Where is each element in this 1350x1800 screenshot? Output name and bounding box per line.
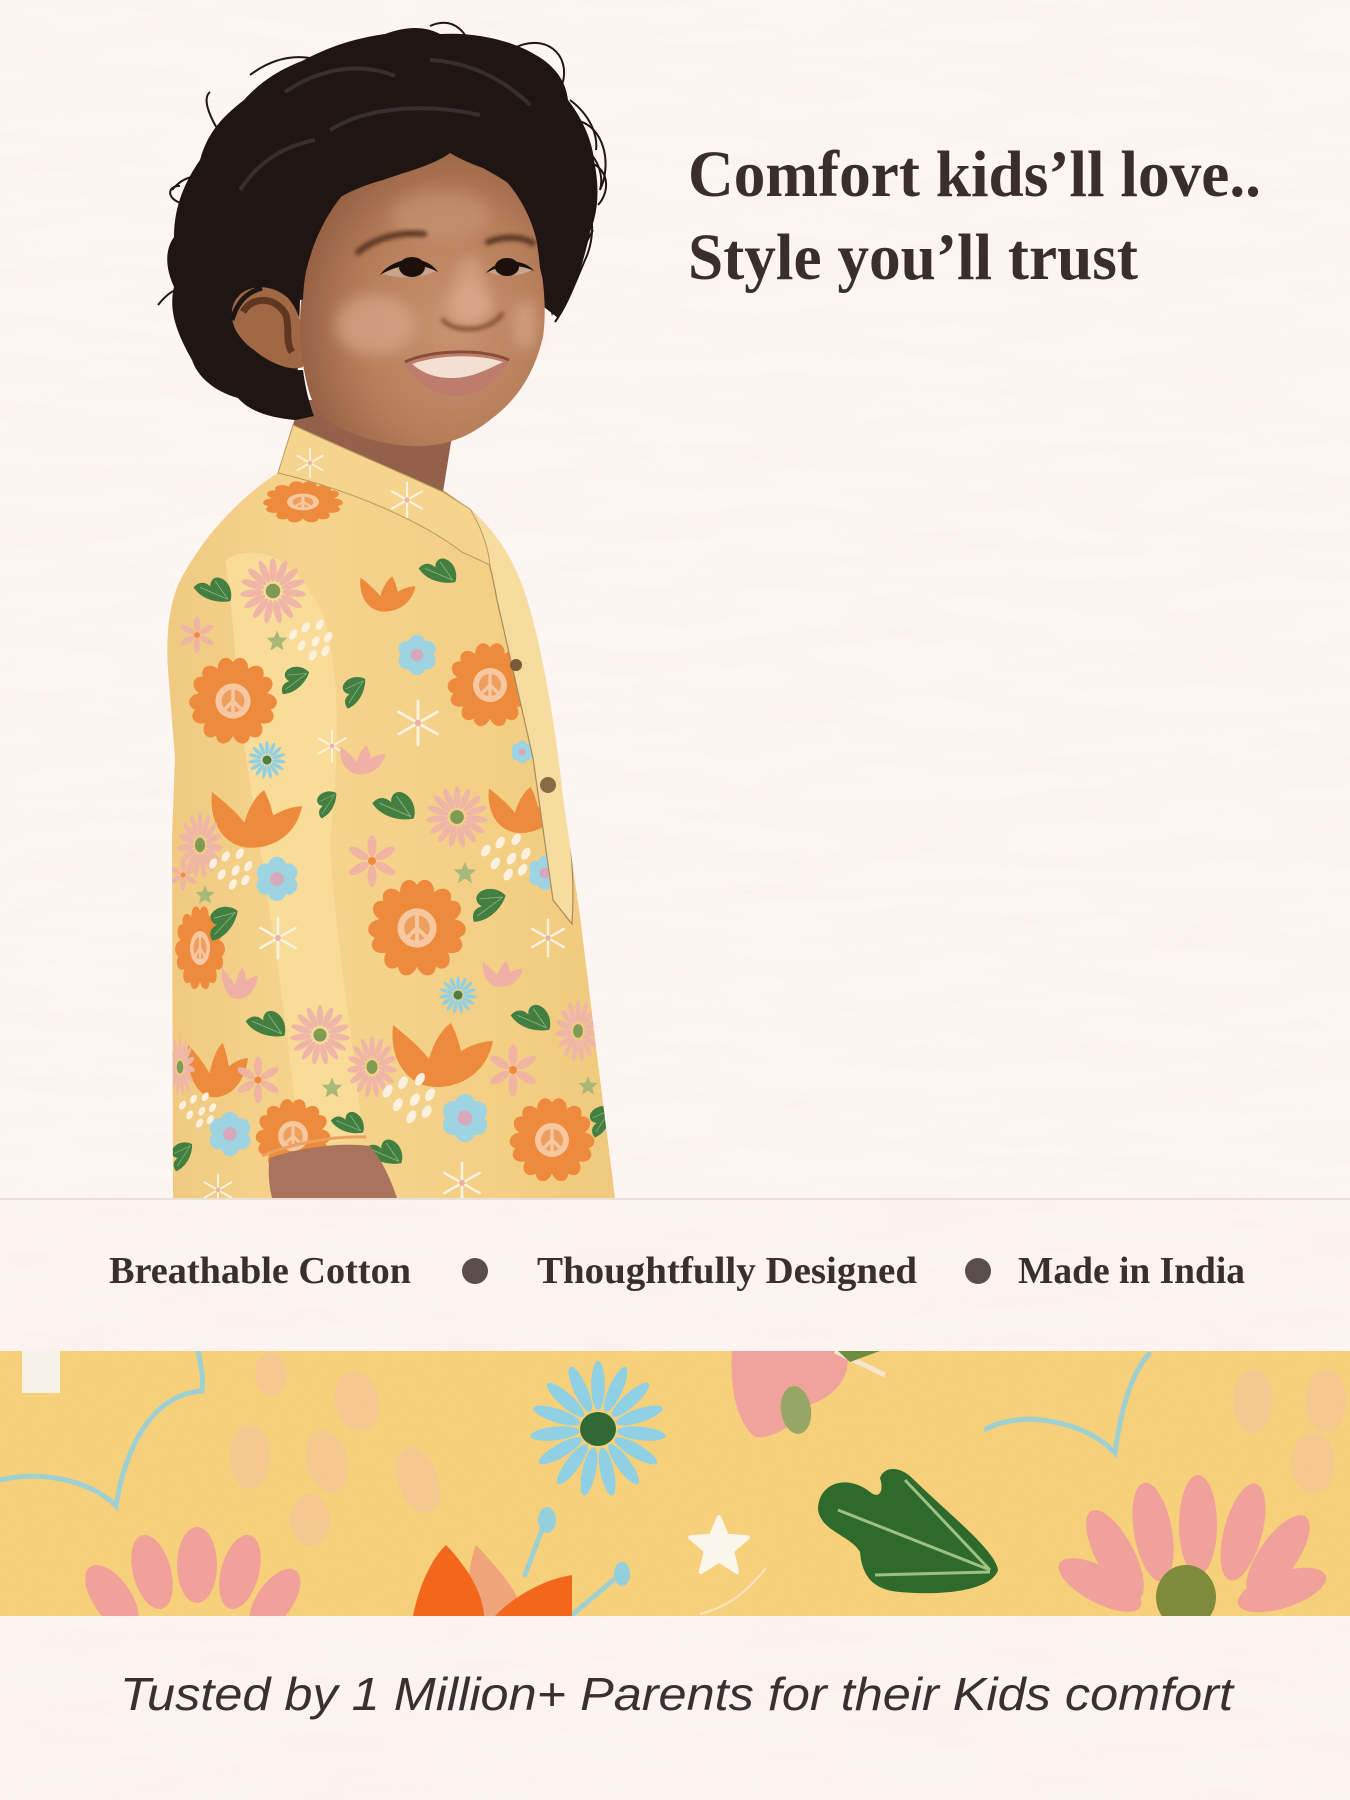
eyebrows (358, 234, 533, 252)
feature: breathable cotton: Breathable Cotton (109, 1250, 411, 1292)
feature row (109, 1250, 1245, 1292)
bullet two (965, 1258, 991, 1284)
placket (470, 509, 573, 924)
photo bottom divider (0, 1198, 1350, 1200)
eyes (380, 257, 534, 277)
head (300, 144, 545, 446)
hand and wrist (262, 1137, 397, 1198)
fabric pattern band (0, 1351, 1350, 1640)
kurta (167, 473, 615, 1198)
cheek highlights (335, 190, 537, 355)
pink daisy left (85, 1527, 300, 1616)
headline line two: Style you’ll trust (688, 221, 1138, 294)
hero headline (688, 138, 1261, 294)
neck opening shadow (443, 490, 478, 560)
smile (405, 352, 509, 396)
bullet one (462, 1258, 488, 1284)
sleeve highlight (225, 552, 363, 1150)
thread (700, 1568, 766, 1614)
hair fringe and side locks (158, 23, 606, 420)
ear (232, 287, 304, 368)
pale pink petals (230, 1352, 1346, 1546)
curls and flyaway wisps (158, 23, 606, 365)
photo: smiling child in floral kurta (158, 23, 630, 1205)
feature: made in india: Made in India (1018, 1250, 1245, 1292)
blue daisy (530, 1361, 666, 1497)
hair back mass (167, 28, 597, 420)
background: hero paper (0, 0, 1350, 1200)
pink tulip (732, 1351, 885, 1437)
face (232, 144, 545, 446)
white star (690, 1517, 748, 1572)
background: lower paper strip (0, 1200, 1350, 1800)
lower left lock (225, 345, 314, 420)
trust tagline: Tusted by 1 Million+ Parents for their Kids comfort (120, 1668, 1235, 1720)
hair highlights (240, 60, 530, 190)
collar band (278, 425, 490, 565)
pink daisy right (1058, 1475, 1326, 1616)
green leaf (818, 1469, 998, 1593)
feature: thoughtfully designed: Thoughtfully Designed (537, 1250, 917, 1292)
white fragment (22, 1351, 60, 1393)
orange tulip (413, 1545, 572, 1616)
blue stem curves (0, 1351, 1149, 1615)
neck (293, 400, 452, 492)
buttons (510, 659, 556, 793)
nose (443, 285, 502, 329)
blue stem buds (538, 1507, 630, 1586)
headline line one: Comfort kids’ll love.. (688, 138, 1261, 211)
